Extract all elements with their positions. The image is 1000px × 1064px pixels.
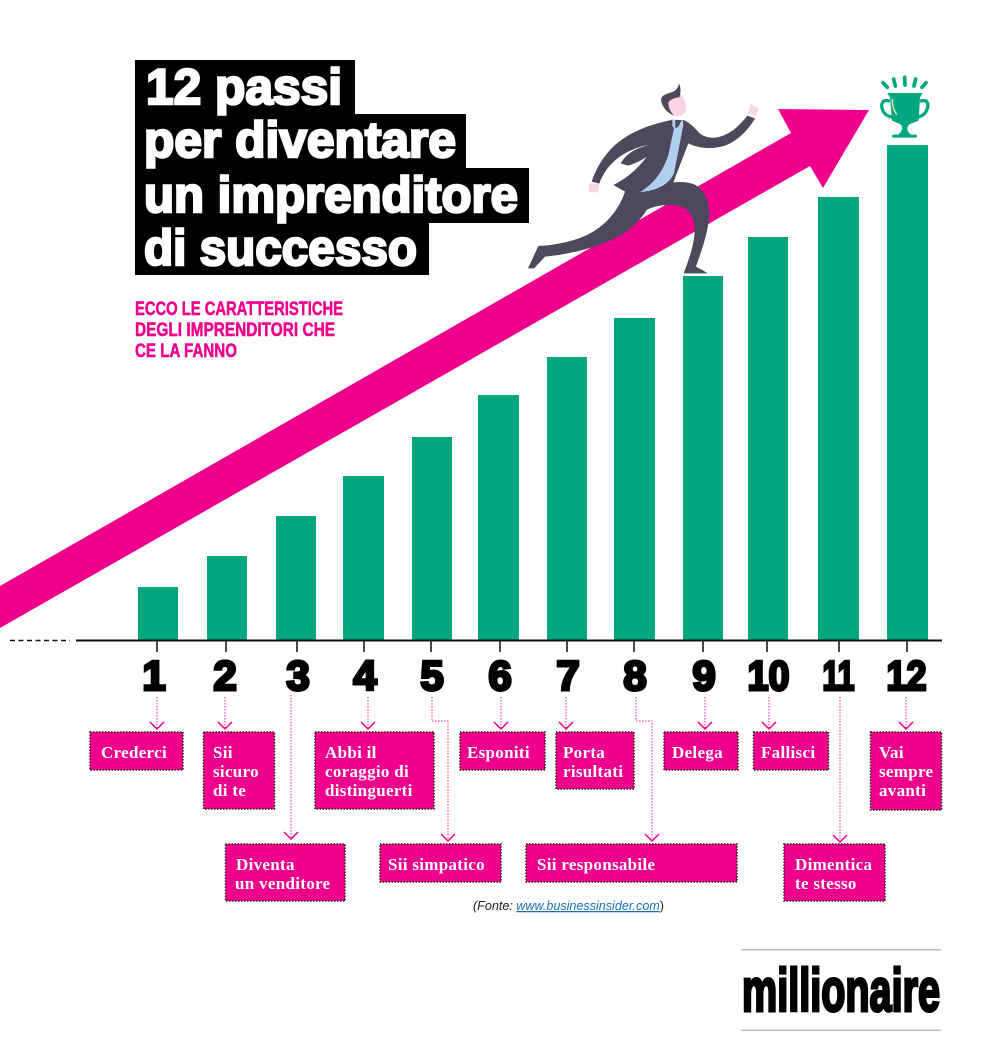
- subtitle: ECCO LE CARATTERISTICHE: [135, 298, 343, 320]
- step 11 label: [784, 844, 885, 901]
- step numbers: 12: [886, 652, 926, 699]
- step 12 label: [870, 732, 942, 810]
- highlight: [892, 99, 896, 114]
- title background: [135, 60, 529, 275]
- step 8 label: Sii responsabile: [537, 855, 655, 874]
- subtitle: CE LA FANNO: [135, 340, 237, 362]
- step 5 label: Sii simpatico: [388, 855, 485, 874]
- dotted connectors with arrowheads: [150, 695, 913, 842]
- rising arrow: [0, 109, 869, 628]
- step 12 label: sempre: [879, 762, 934, 781]
- shirt and tie: [640, 119, 683, 192]
- title line 4: di successo: [144, 220, 417, 276]
- step numbers: 4: [353, 652, 377, 699]
- tie knot: [675, 120, 682, 128]
- step numbers: 8: [623, 652, 647, 699]
- step numbers: 1: [142, 652, 166, 699]
- step numbers: 7: [556, 652, 580, 699]
- step numbers: 6: [488, 652, 512, 699]
- step 4 label: coraggio di: [325, 762, 409, 781]
- hair: [661, 83, 681, 116]
- step numbers: 10: [748, 652, 790, 699]
- step 2 label: [204, 732, 274, 809]
- step 9 label: [664, 732, 738, 770]
- step 2 label: Sii: [213, 743, 233, 762]
- step 1 label: [90, 732, 183, 770]
- step numbers: 2: [213, 652, 237, 699]
- step 3 label: Diventa: [236, 855, 295, 874]
- step numbers: 11: [822, 652, 854, 699]
- step 4 label: [315, 732, 434, 809]
- icon: running businessman: [528, 83, 759, 273]
- source note: (Fonte: www.businessinsider.com): [473, 899, 664, 913]
- step numbers: 5: [420, 652, 444, 699]
- step 7 label: Porta: [563, 743, 605, 762]
- subtitle: [135, 298, 343, 362]
- title line 2: per diventare: [144, 112, 456, 168]
- subtitle: DEGLI IMPRENDITORI CHE: [135, 319, 335, 341]
- step 1 label: Crederci: [101, 743, 167, 762]
- rays: [883, 77, 926, 87]
- head: [667, 93, 686, 116]
- step numbers: [142, 652, 926, 699]
- step 9 label: Delega: [672, 743, 723, 762]
- step 5 label: [380, 844, 501, 882]
- step 4 label: Abbi il: [325, 743, 377, 762]
- step 6 label: [460, 732, 545, 770]
- step 7 label: [556, 732, 634, 789]
- step numbers: 3: [286, 652, 310, 699]
- step 3 label: [226, 844, 345, 901]
- step 10 label: Fallisci: [761, 743, 815, 762]
- bar chart: [138, 145, 928, 640]
- title line 3: un imprenditore: [144, 167, 518, 223]
- left hand: [588, 183, 599, 193]
- right hand: [748, 104, 759, 116]
- cup: [887, 93, 923, 138]
- title line 1: 12 passi: [146, 59, 342, 115]
- step 12 label: Vai: [879, 743, 904, 762]
- step 7 label: risultati: [563, 762, 623, 781]
- step numbers: 9: [692, 652, 716, 699]
- axis with ticks: [10, 640, 942, 652]
- step 6 label: Esponiti: [467, 743, 530, 762]
- handles: [882, 101, 928, 117]
- step 10 label: [754, 732, 828, 770]
- title: [135, 59, 529, 276]
- step 4 label: distinguerti: [325, 781, 413, 800]
- icon: trophy: [882, 77, 928, 138]
- step 8 label: [526, 844, 737, 882]
- step 3 label: un venditore: [235, 874, 331, 893]
- step 12 label: avanti: [879, 781, 926, 800]
- step 2 label: di te: [213, 781, 246, 800]
- step 2 label: sicuro: [213, 762, 259, 781]
- step 11 label: te stesso: [795, 874, 857, 893]
- step 11 label: Dimentica: [795, 855, 872, 874]
